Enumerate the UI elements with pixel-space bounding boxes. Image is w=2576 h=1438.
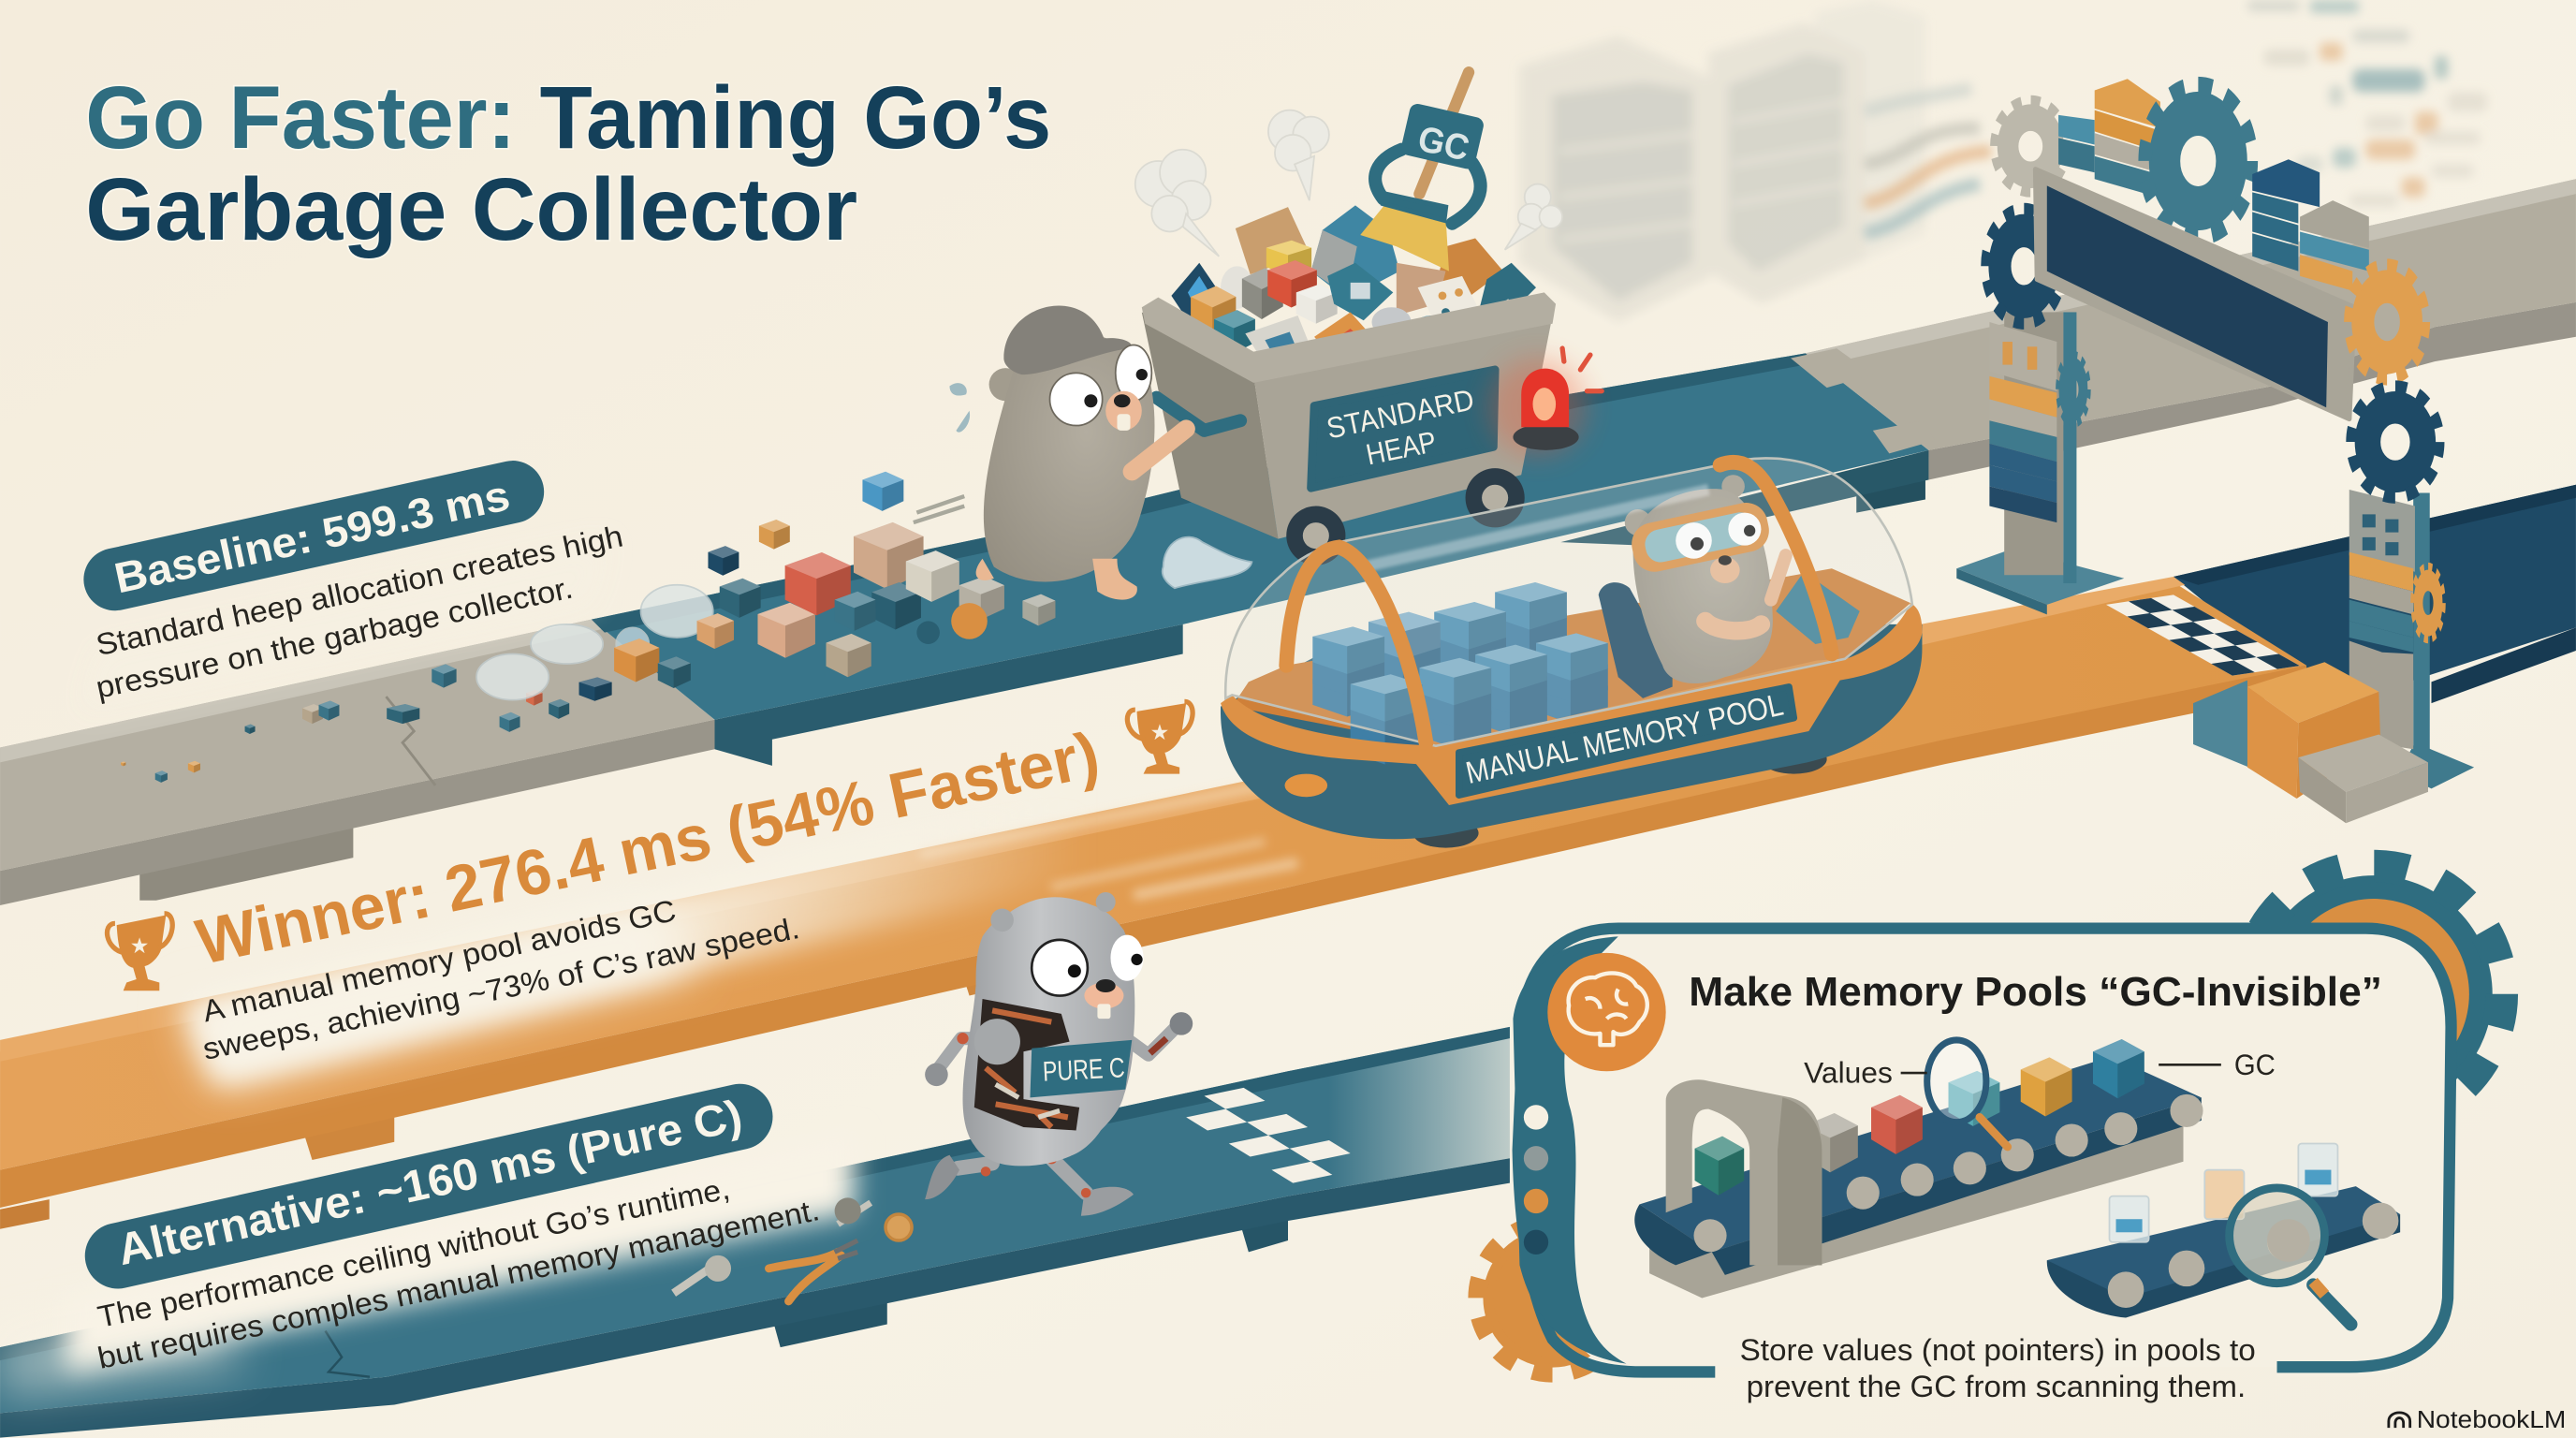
- panel caption: prevent the GC from scanning them.: [1747, 1370, 2246, 1403]
- gc label: GC: [2234, 1048, 2276, 1081]
- gopher: pushing cart: [949, 305, 1186, 600]
- pile of blocks: [614, 472, 1055, 688]
- steam clouds: [1135, 110, 1562, 257]
- heap cart: [1135, 72, 1602, 565]
- panel frame: [1534, 929, 2452, 1377]
- gear: grey: [1995, 101, 2067, 192]
- driver seat: [1599, 582, 1673, 698]
- gear: teal side: [2057, 355, 2089, 424]
- conveyor: invisible values: [2047, 1143, 2400, 1318]
- blocks at arch foot: [2193, 662, 2428, 823]
- exposed circuitry: [974, 999, 1079, 1130]
- manual memory pool label: MANUAL MEMORY POOL: [1463, 688, 1786, 791]
- blocks on top of arch right: [2252, 159, 2369, 291]
- track: baseline heap lane: [0, 179, 2576, 905]
- magnifier: lens: [2230, 1188, 2351, 1325]
- panel heading: Make Memory Pools “GC-Invisible”: [1689, 969, 2382, 1015]
- capsule vehicle: [1221, 458, 1922, 848]
- gear: orange: [2349, 266, 2425, 378]
- track: navy lane behind arch: [2174, 485, 2576, 707]
- gear: panel top right: [2246, 866, 2502, 1123]
- baseline description: Standard heep allocation creates high: [93, 520, 626, 662]
- blurred code fragments: [2247, 0, 2487, 207]
- arch: left pillar: [1956, 312, 2124, 614]
- cap: [1003, 305, 1132, 374]
- capsule hull: [1221, 624, 1922, 839]
- dashboard: [1776, 572, 1860, 644]
- capsule headlight: [1284, 774, 1327, 797]
- magnifier: values: [1927, 1040, 2008, 1147]
- red siren: [1488, 348, 1602, 457]
- arch: right pillar: [2349, 490, 2474, 788]
- icon: trophy left: ★: [130, 933, 149, 958]
- broom: [1360, 72, 1469, 271]
- track: alternative teal lane: [0, 1027, 1510, 1438]
- alternative description: but requires comples manual memory management.: [95, 1193, 822, 1375]
- scattered debris on grey: [121, 664, 612, 783]
- capsule wheels: [1412, 818, 1479, 848]
- gc claw: [1375, 102, 1486, 224]
- alternative section: [79, 1078, 822, 1375]
- gopher: driver: [1625, 475, 1786, 683]
- gear: teal large: [2145, 86, 2251, 236]
- checkered finish line: teal lane: [1186, 1088, 1351, 1183]
- panel dots: [1524, 1105, 1548, 1255]
- capsule floor: [1232, 568, 1910, 746]
- panel caption: [1740, 1333, 2256, 1403]
- checkered finish line: orange lane: [2106, 594, 2300, 676]
- gear: navy upper: [1985, 210, 2062, 322]
- icon: trophy right: ★: [1150, 720, 1169, 744]
- metal body: [963, 897, 1134, 1166]
- pure c label: [1030, 1040, 1132, 1097]
- cart wheels: [1286, 468, 1525, 565]
- standard heap label: HEAP: [1363, 424, 1439, 472]
- blurred data-flow arrows: [1865, 89, 1991, 233]
- gc label: [2159, 1048, 2276, 1081]
- standard heap label: [1311, 370, 1495, 488]
- winner description: A manual memory pool avoids GC: [199, 893, 679, 1028]
- finish arch with gears: [1956, 79, 2474, 823]
- dome highlight: [1364, 490, 1708, 566]
- gear: navy lower: [2351, 388, 2439, 496]
- panel caption: Store values (not pointers) in pools to: [1740, 1333, 2256, 1367]
- baseline pill: [78, 455, 550, 617]
- speed streaks: [920, 785, 1298, 895]
- eyes and snout: [1050, 373, 1103, 426]
- panel: GC-invisible tip: [1478, 866, 2502, 1403]
- alternative pill: Alternative: ~160 ms (Pure C): [113, 1091, 747, 1275]
- dome hoops: [1286, 462, 1832, 742]
- face: [1032, 940, 1088, 996]
- arch sign board: [2036, 169, 2354, 419]
- motion lines: [914, 496, 964, 522]
- icon: trophy left: [107, 914, 172, 990]
- baseline section: [78, 455, 626, 705]
- title: [85, 68, 1051, 259]
- icon: brain: [1547, 953, 1666, 1071]
- icon: trophy right: [1127, 701, 1193, 774]
- title: Garbage Collector: [85, 160, 857, 259]
- glass shards: [476, 585, 713, 700]
- capsule front band: [1221, 603, 1922, 805]
- pile in cart: [1171, 205, 1536, 365]
- cart bin: [1142, 292, 1556, 539]
- dust puff: [1163, 537, 1251, 588]
- winner description: sweeps, achieving ~73% of C’s raw speed.: [200, 911, 802, 1066]
- standard heap label: STANDARD: [1324, 382, 1477, 445]
- notebooklm watermark: NotebookLM: [2417, 1405, 2566, 1433]
- values label: Values: [1804, 1056, 1893, 1090]
- alternative description: The performance ceiling without Go’s runtime,: [95, 1171, 732, 1334]
- gc claw: GC: [1414, 119, 1473, 169]
- scanner gate: [1666, 1079, 1822, 1265]
- legs and arms: [936, 1023, 1179, 1193]
- scattered tools: [674, 1197, 912, 1301]
- conveyor: scanned pointers: [1634, 1039, 2203, 1298]
- winner section: [107, 701, 1193, 1066]
- glass dome: [1225, 458, 1912, 746]
- debris on heap lane: [121, 472, 1251, 783]
- blurred server racks: [1519, 0, 1925, 322]
- track: winner orange lane: [0, 577, 2306, 1229]
- winner heading: Winner: 276.4 ms (54% Faster): [190, 718, 1105, 978]
- blue memory blocks: [1312, 582, 1608, 764]
- shoulder joint: [974, 1019, 1020, 1064]
- title: Go Faster: Taming Go’s: [85, 68, 1051, 168]
- blocks on top of arch left: [2058, 79, 2160, 196]
- cart handle: [1157, 398, 1240, 431]
- gopher: metal pure C: [925, 892, 1193, 1216]
- baseline pill: Baseline: 599.3 ms: [110, 471, 514, 602]
- text glow over lanes: [0, 542, 1084, 1397]
- baseline description: pressure on the garbage collector.: [93, 571, 576, 705]
- gear: panel bottom left: [1478, 1223, 1628, 1373]
- pure c label: PURE C: [1042, 1052, 1125, 1088]
